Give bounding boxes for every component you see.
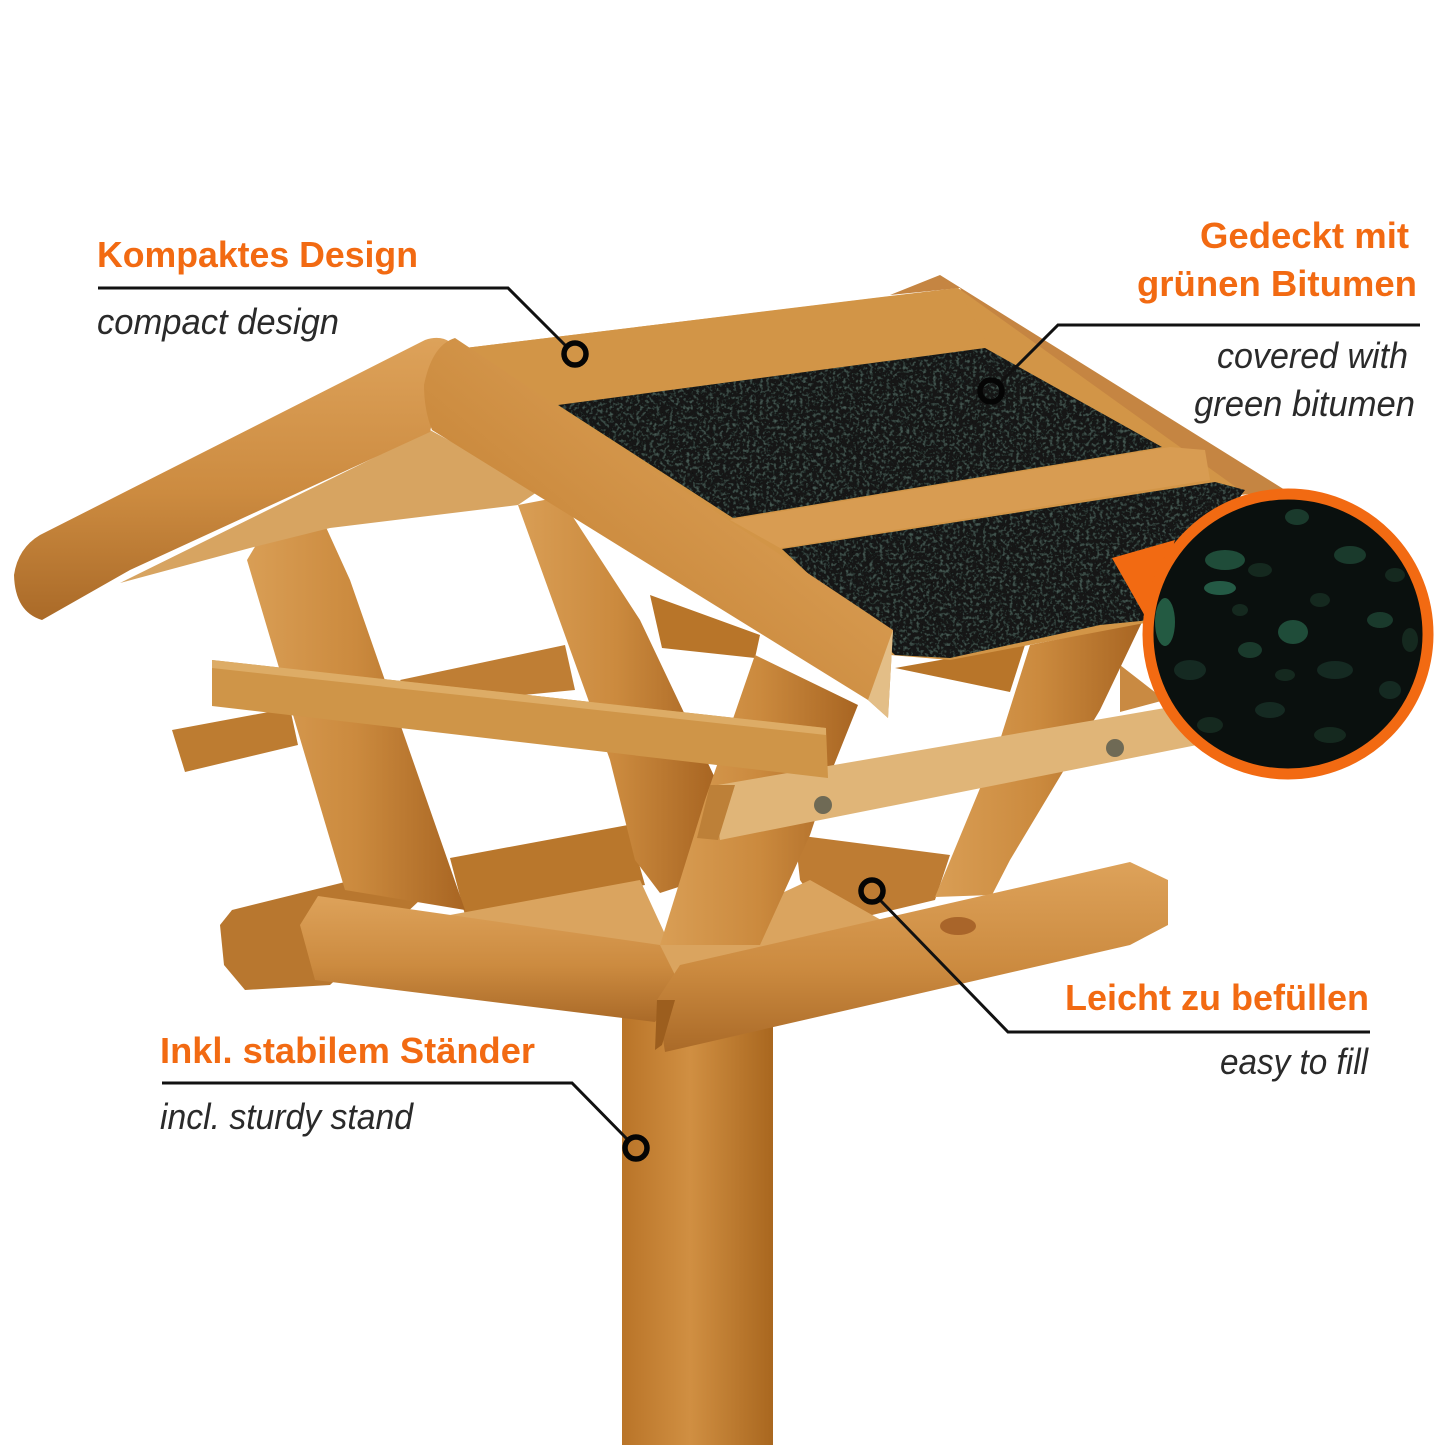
roof side eave bbox=[890, 275, 1285, 495]
heading: Kompaktes Design bbox=[97, 234, 418, 275]
roof underside bbox=[120, 430, 540, 583]
front bar bbox=[212, 660, 828, 778]
leader line bbox=[98, 288, 566, 346]
heading: Gedeckt mit bbox=[1200, 215, 1409, 256]
callout: sturdy stand bbox=[160, 1030, 647, 1159]
stand post bbox=[622, 1010, 773, 1445]
heading line 2: grünen Bitumen bbox=[1137, 263, 1417, 304]
left roof log bbox=[14, 338, 450, 620]
roof backing bbox=[465, 288, 1240, 660]
marker bbox=[861, 880, 883, 902]
heading: Inkl. stabilem Ständer bbox=[160, 1030, 535, 1071]
product photo: wooden bird feeder bbox=[14, 275, 1285, 1445]
callout: easy to fill bbox=[861, 880, 1370, 1082]
lens bbox=[1148, 494, 1428, 774]
callout: covered with green bitumen bbox=[980, 215, 1420, 424]
leader line bbox=[162, 1083, 628, 1140]
right roof log bbox=[424, 338, 893, 718]
tray front logs bbox=[300, 862, 1168, 1052]
front centre post bbox=[660, 655, 858, 945]
leader line bbox=[999, 325, 1420, 384]
leader line bbox=[880, 900, 1370, 1032]
tray floor bbox=[450, 880, 890, 985]
subtext: compact design bbox=[97, 301, 339, 342]
pointer triangle bbox=[1112, 540, 1175, 625]
marker bbox=[980, 380, 1002, 402]
top plank bbox=[465, 288, 988, 407]
bitumen upper bbox=[558, 348, 1162, 518]
subtext line 2: green bitumen bbox=[1194, 383, 1415, 424]
subtext: easy to fill bbox=[1220, 1041, 1369, 1082]
marker bbox=[625, 1137, 647, 1159]
subtext: covered with bbox=[1217, 335, 1408, 376]
rear bars bbox=[172, 595, 1165, 772]
back posts bbox=[518, 497, 1142, 897]
middle batten bbox=[730, 447, 1210, 548]
magnifier: bitumen close-up bbox=[1112, 494, 1428, 774]
bitumen lower bbox=[782, 482, 1245, 658]
subtext: incl. sturdy stand bbox=[160, 1096, 414, 1137]
heading: Leicht zu befüllen bbox=[1065, 977, 1369, 1018]
callout: compact design bbox=[97, 234, 586, 365]
granules bbox=[1155, 509, 1418, 743]
tray back logs bbox=[220, 825, 950, 990]
front left post bbox=[247, 525, 465, 910]
log end grain bbox=[868, 630, 893, 718]
right front bar bbox=[697, 708, 1197, 840]
marker bbox=[564, 343, 586, 365]
